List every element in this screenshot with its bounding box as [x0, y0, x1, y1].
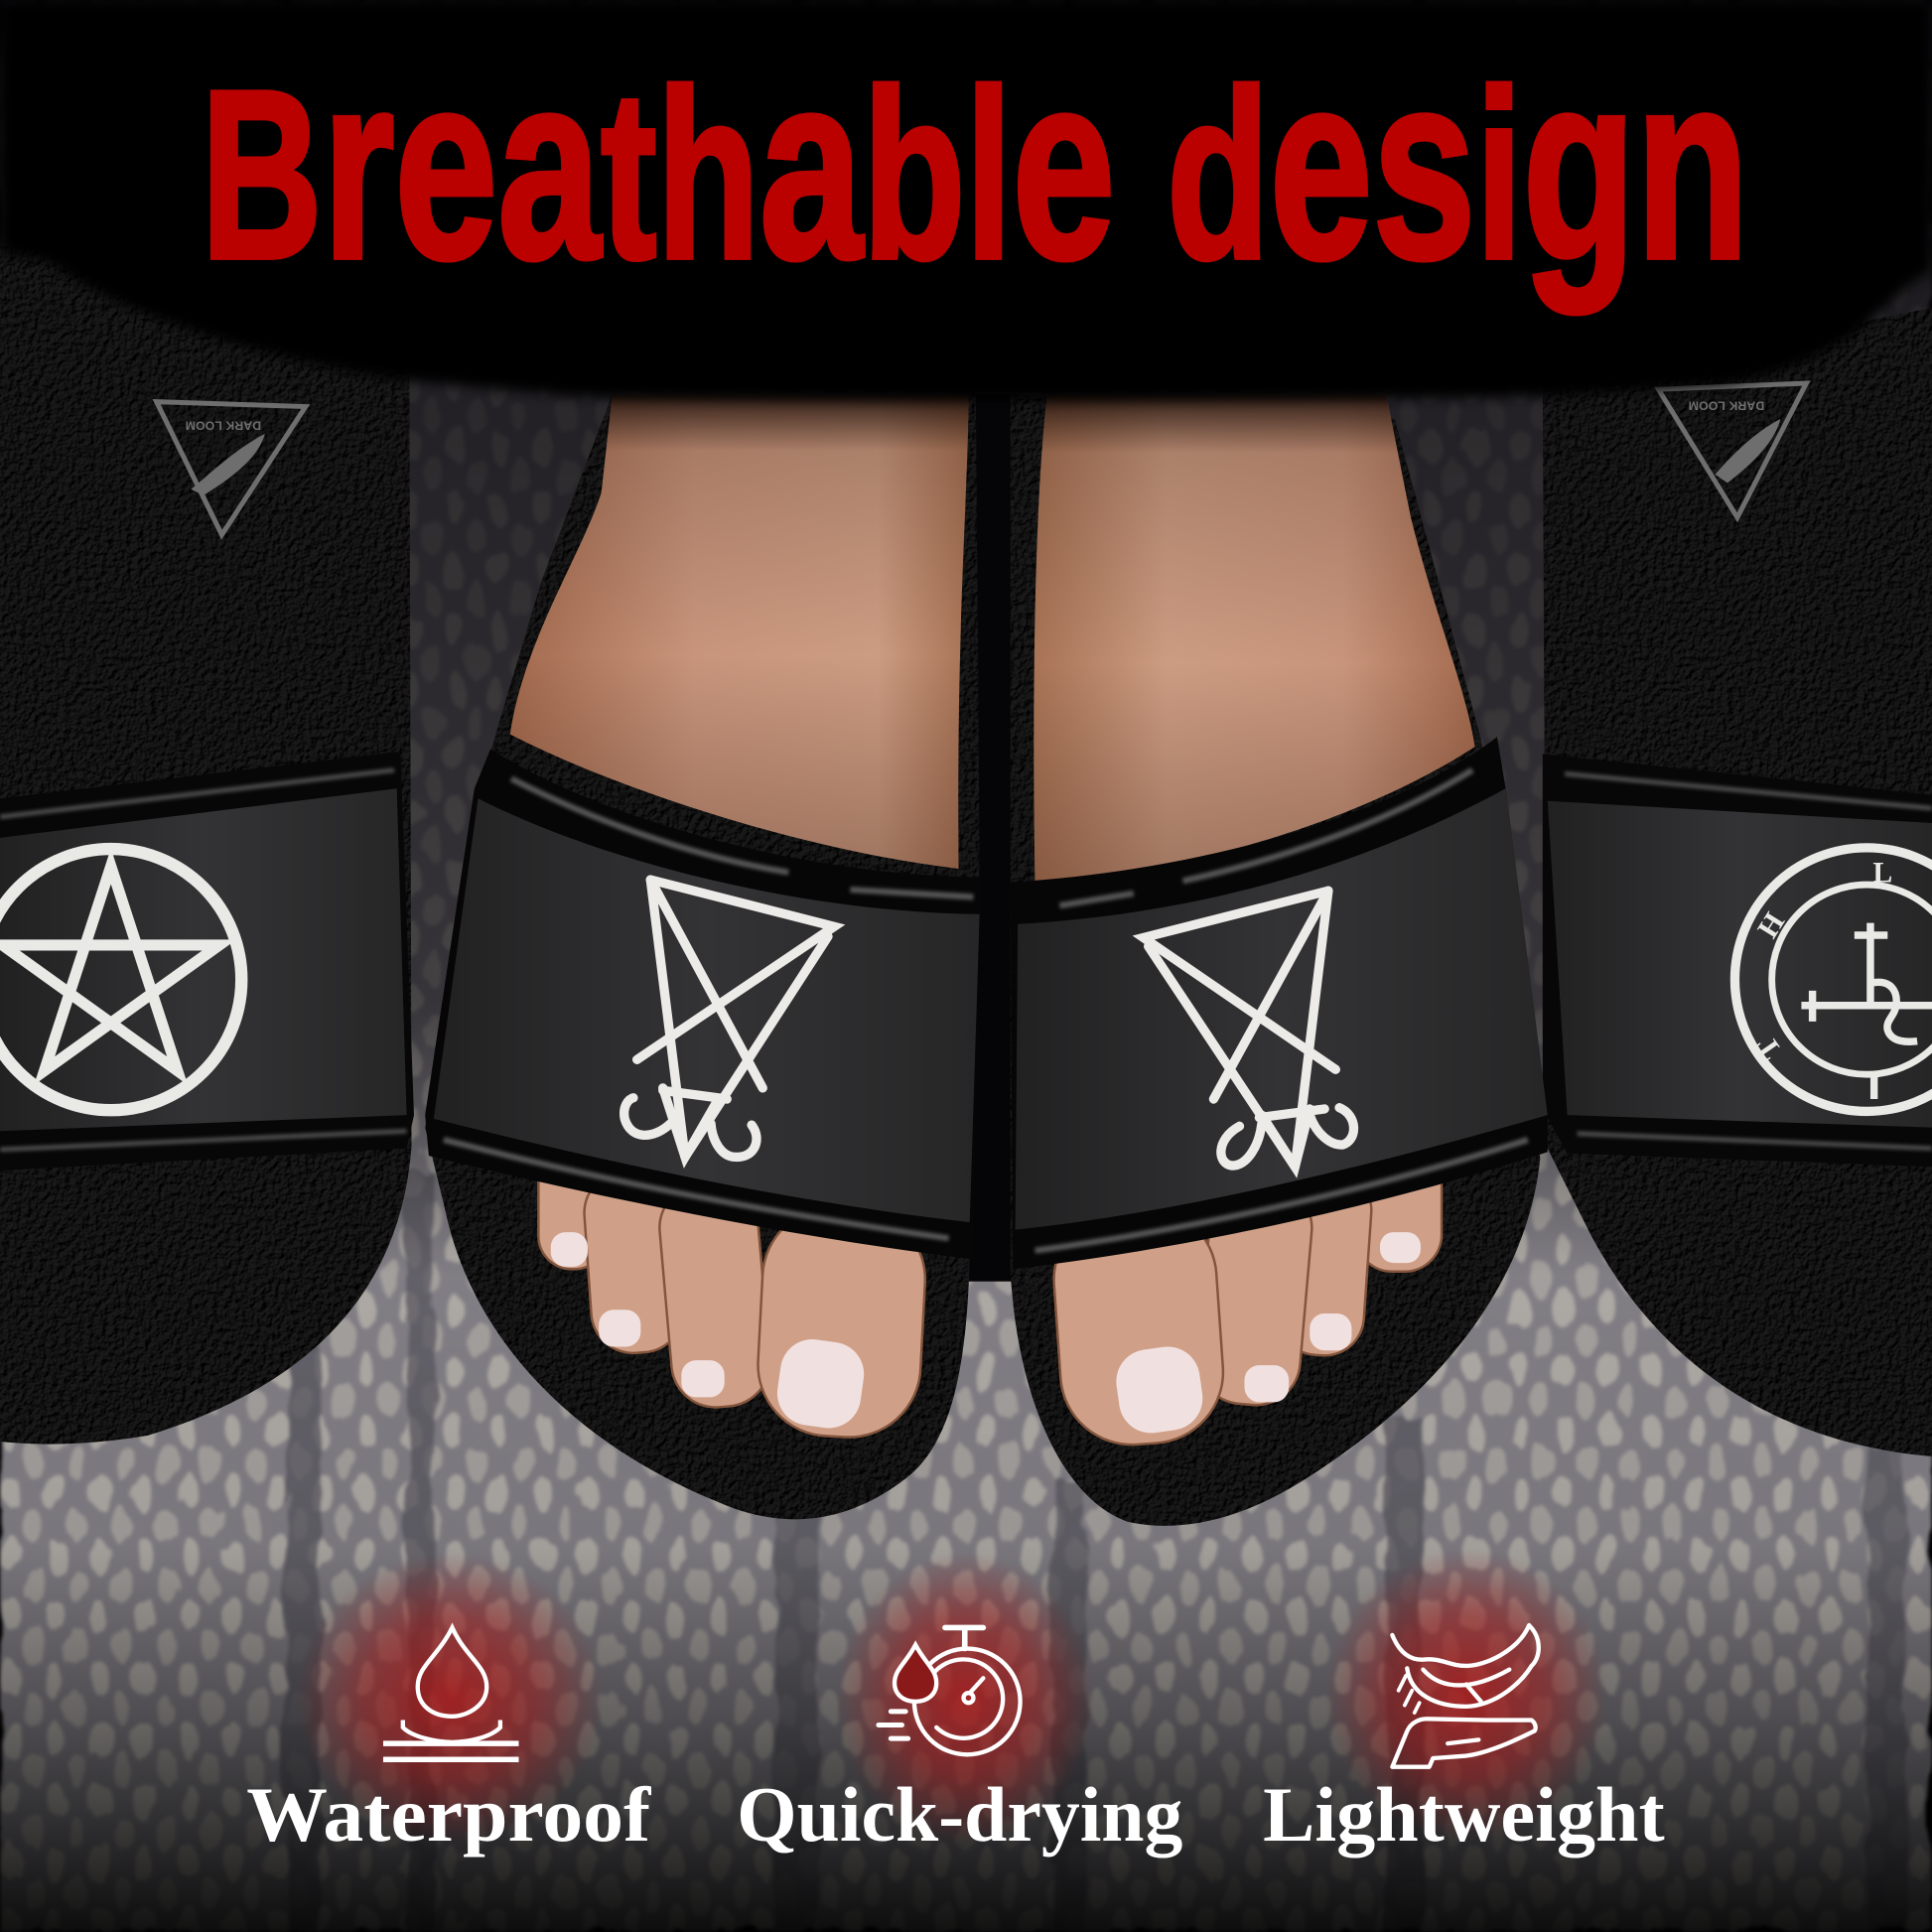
- footbed logo: triangle: [1658, 383, 1806, 517]
- red glow: quick-drying: [835, 1553, 1094, 1844]
- red glow: waterproof: [296, 1553, 604, 1844]
- ankle and heel: [510, 394, 968, 869]
- lilith sigil seal: H: [1751, 906, 1791, 944]
- footbed: [1543, 308, 1932, 1456]
- right foot in sandal: [1011, 394, 1548, 1526]
- ankle and heel: [1034, 394, 1475, 883]
- feature: quick-drying: [737, 1627, 1182, 1858]
- toenails: [1112, 1232, 1421, 1438]
- left outer slide sandal: [0, 246, 414, 1445]
- footbed: [425, 394, 980, 1519]
- sigil of Lucifer: [624, 880, 834, 1157]
- label: Waterproof: [246, 1771, 651, 1858]
- footbed: [1011, 394, 1540, 1526]
- right outer slide sandal: [1543, 308, 1932, 1456]
- icon: water drop on surface: [383, 1627, 518, 1759]
- strap: [425, 750, 981, 1259]
- label: Quick-drying: [737, 1771, 1182, 1858]
- label: Lightweight: [1263, 1771, 1665, 1858]
- icon: feather over hand: [1392, 1625, 1539, 1767]
- toes: [1049, 1146, 1442, 1449]
- lilith sigil seal: L: [1872, 857, 1892, 890]
- sigil of Lucifer: [1144, 891, 1354, 1167]
- lilith sigil seal: [1734, 848, 1932, 1111]
- pentagram symbol: [0, 849, 241, 1110]
- footbed logo: triangle: DARK LOOM: [1689, 399, 1764, 413]
- footbed logo: triangle: [157, 402, 306, 535]
- feature: lightweight: [1263, 1625, 1665, 1858]
- strap: [1011, 737, 1548, 1269]
- strap: [1543, 755, 1932, 1167]
- left foot in sandal: [425, 394, 981, 1519]
- black cloth header band: [0, 0, 1932, 400]
- lilith sigil seal: T: [1750, 1031, 1788, 1065]
- footbed: [0, 246, 412, 1445]
- toes: [538, 1146, 928, 1441]
- feature: waterproof: [246, 1627, 651, 1858]
- strap: [0, 752, 414, 1171]
- title: Breathable design: [201, 18, 1749, 314]
- red glow: lightweight: [1324, 1549, 1608, 1840]
- toenails: [551, 1232, 868, 1433]
- footbed logo: triangle: DARK LOOM: [186, 418, 261, 432]
- icon: stopwatch with drop: [879, 1627, 1021, 1754]
